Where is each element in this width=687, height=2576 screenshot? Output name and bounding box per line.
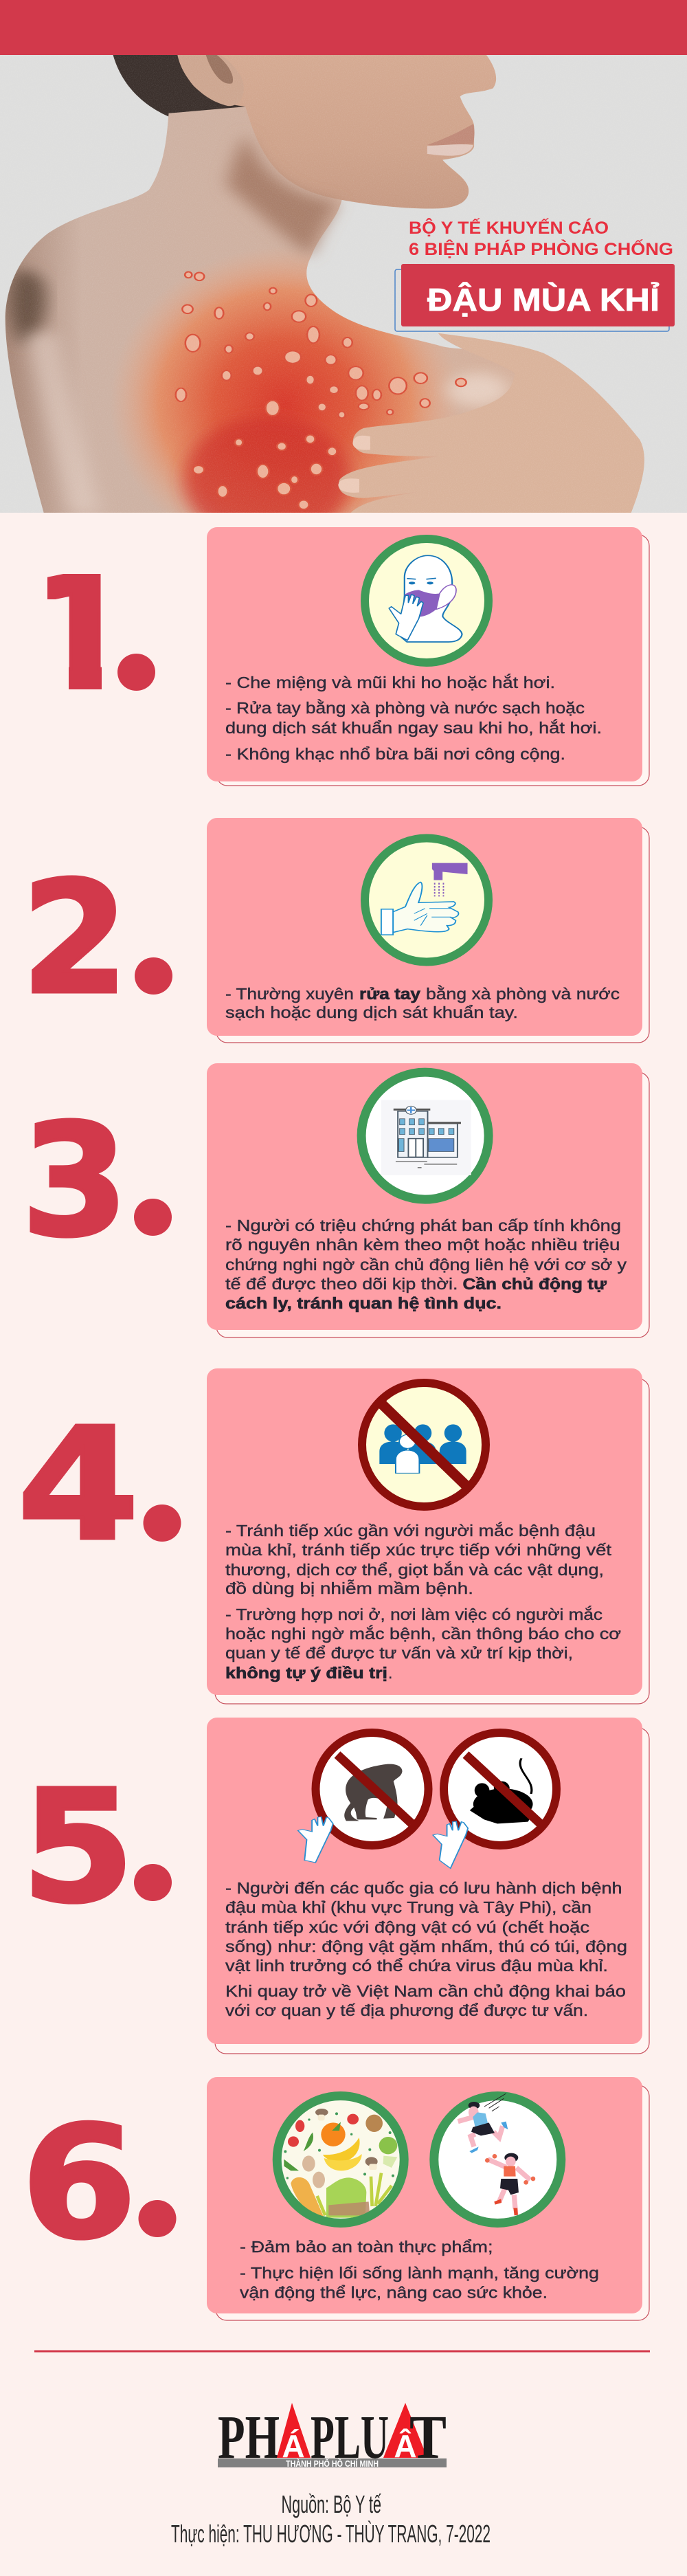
number 2: .: [136, 924, 159, 997]
text block: step 5: Khi quay trở về Việt Nam cần chủ động khai báo: [225, 1982, 626, 2000]
number 5: .: [135, 1831, 159, 1903]
text block: step 4: thương, dịch cơ thể, giọt bắn và các vật dụng,: [225, 1561, 604, 1579]
panel: step 3: [207, 1063, 649, 1337]
number 6: [21, 2094, 176, 2274]
panel: step 6: [207, 2077, 649, 2320]
text block: step 1: - Rửa tay bằng xà phòng và nước sạch hoặc: [225, 699, 585, 717]
icon: no contact with rodents: [433, 1733, 556, 1868]
text block: step 6: - Thực hiện lối sống lành mạnh, tăng cường: [240, 2264, 599, 2282]
text block: step 1: - Không khạc nhổ bừa bãi nơi công cộng.: [225, 745, 565, 763]
number 1: .: [129, 619, 153, 691]
logo: Pháp Luật: [218, 2403, 447, 2472]
text block: step 4: - Trường hợp nơi ở, nơi làm việc có người mắc: [225, 1606, 602, 1623]
number 6: 6: [21, 2094, 137, 2274]
number 4: .: [145, 1472, 168, 1544]
text block: step 5: sống) như: động vật gặm nhấm, thú có túi, động: [225, 1937, 627, 1955]
text block: step 5: đậu mùa khỉ (khu vực Trung và Tây Phi), cần: [225, 1898, 592, 1916]
text block: step 5: [225, 1879, 627, 2019]
text block: step 3: [225, 1217, 627, 1312]
text block: step 4: .: [388, 1664, 392, 1682]
icon: hospital: [361, 1072, 488, 1199]
header band: [0, 0, 687, 55]
logo: Pháp Luật: PLU: [311, 2403, 389, 2472]
number 2: 2: [21, 849, 128, 1029]
panel: step 1: [207, 527, 649, 786]
text block: step 3: chứng nghi ngờ cần chủ động liên hệ với cơ sở y: [225, 1256, 627, 1274]
number 4: [17, 1395, 181, 1575]
hero photo: woman with rash on shoulder: [0, 55, 687, 559]
text block: step 6: vận động thể lực, nâng cao sức khỏe.: [240, 2283, 548, 2301]
text block: step 3: Cần chủ động tự: [463, 1275, 607, 1293]
text block: step 2: - Thường xuyên: [225, 985, 354, 1003]
icon: hand washing under tap: [365, 839, 488, 962]
panel: step 4: [207, 1368, 649, 1704]
number 6: .: [140, 2167, 164, 2239]
logo: Pháp Luật: Ậ: [394, 2428, 417, 2464]
title banner: monkeypox: ĐẬU MÙA KHỈ: [427, 282, 660, 318]
number 4: 4: [17, 1395, 139, 1575]
text block: step 6: [240, 2238, 599, 2301]
title: subtitle lines: 6 BIỆN PHÁP PHÒNG CHỐNG: [409, 238, 673, 259]
logo: Pháp Luật: PH: [218, 2403, 280, 2472]
panel: step 5: [207, 1718, 649, 2054]
text block: step 1: [225, 674, 602, 763]
text block: step 4: quan y tế để được tư vấn và xử trí kịp thời,: [225, 1644, 573, 1662]
text block: step 6: - Đảm bảo an toàn thực phẩm;: [240, 2238, 493, 2256]
text block: step 3: - Người có triệu chứng phát ban cấp tính không: [225, 1217, 621, 1234]
text block: step 1: - Che miệng và mũi khi ho hoặc hắt hơi.: [225, 674, 555, 691]
icon: exercise: [434, 2094, 561, 2223]
logo: Pháp Luật: Á: [282, 2428, 305, 2464]
icon: no crowds: [362, 1383, 486, 1507]
text block: step 5: vật linh trưởng có thể chứa virus đậu mùa khỉ.: [225, 1957, 608, 1975]
text block: step 5: - Người đến các quốc gia có lưu hành dịch bệnh: [225, 1879, 622, 1897]
divider line: [34, 2351, 650, 2352]
text block: step 2: [225, 985, 620, 1021]
text block: step 5: tránh tiếp xúc với động vật có vú (chết hoặc: [225, 1918, 589, 1936]
icon: healthy food: [277, 2096, 404, 2223]
text block: step 4: [225, 1522, 621, 1682]
panel: step 2: [207, 818, 649, 1043]
logo: Pháp Luật: THÀNH PHỐ HỒ CHÍ MINH: [286, 2458, 379, 2469]
title: subtitle lines: [409, 217, 673, 259]
text block: step 4: - Tránh tiếp xúc gần với người mắc bệnh đậu: [225, 1522, 596, 1540]
title: subtitle lines: BỘ Y TẾ KHUYẾN CÁO: [409, 217, 609, 238]
text block: step 4: không tự ý điều trị: [225, 1664, 387, 1682]
icon: no contact with monkeys: [298, 1733, 429, 1863]
logo: Pháp Luật: T: [409, 2403, 447, 2472]
text block: step 4: hoặc nghi ngờ mắc bệnh, cần thông báo cho cơ: [225, 1625, 621, 1643]
text block: step 1: dung dịch sát khuẩn ngay sau khi ho, hắt hơi.: [225, 719, 602, 737]
number 3: 3: [21, 1091, 128, 1272]
text block: step 5: với cơ quan y tế địa phương để được tư vấn.: [225, 2001, 588, 2019]
number 3: .: [135, 1166, 159, 1238]
text block: step 4: mùa khỉ, tránh tiếp xúc trực tiếp với những vết: [225, 1541, 612, 1559]
source credit: Nguồn: Bộ Y tế: [282, 2490, 381, 2518]
title banner: monkeypox: [395, 264, 675, 331]
number 1: 1: [26, 544, 136, 727]
number 5: 5: [21, 1757, 135, 1937]
text block: step 2: rửa tay: [359, 985, 420, 1003]
icon: person with mask covering cough: [365, 539, 488, 663]
text block: step 3: cách ly, tránh quan hệ tình dục.: [225, 1294, 502, 1312]
number 1: [47, 574, 155, 691]
text block: step 4: đồ dùng bị nhiễm mầm bệnh.: [225, 1579, 473, 1597]
text block: step 3: rõ nguyên nhân kèm theo một hoặc nhiều triệu: [225, 1236, 620, 1254]
text block: step 2: bằng xà phòng và nước: [426, 985, 620, 1003]
text block: step 2: sạch hoặc dung dịch sát khuẩn tay.: [225, 1003, 518, 1021]
text block: step 3: tế để được theo dõi kịp thời.: [225, 1275, 458, 1293]
